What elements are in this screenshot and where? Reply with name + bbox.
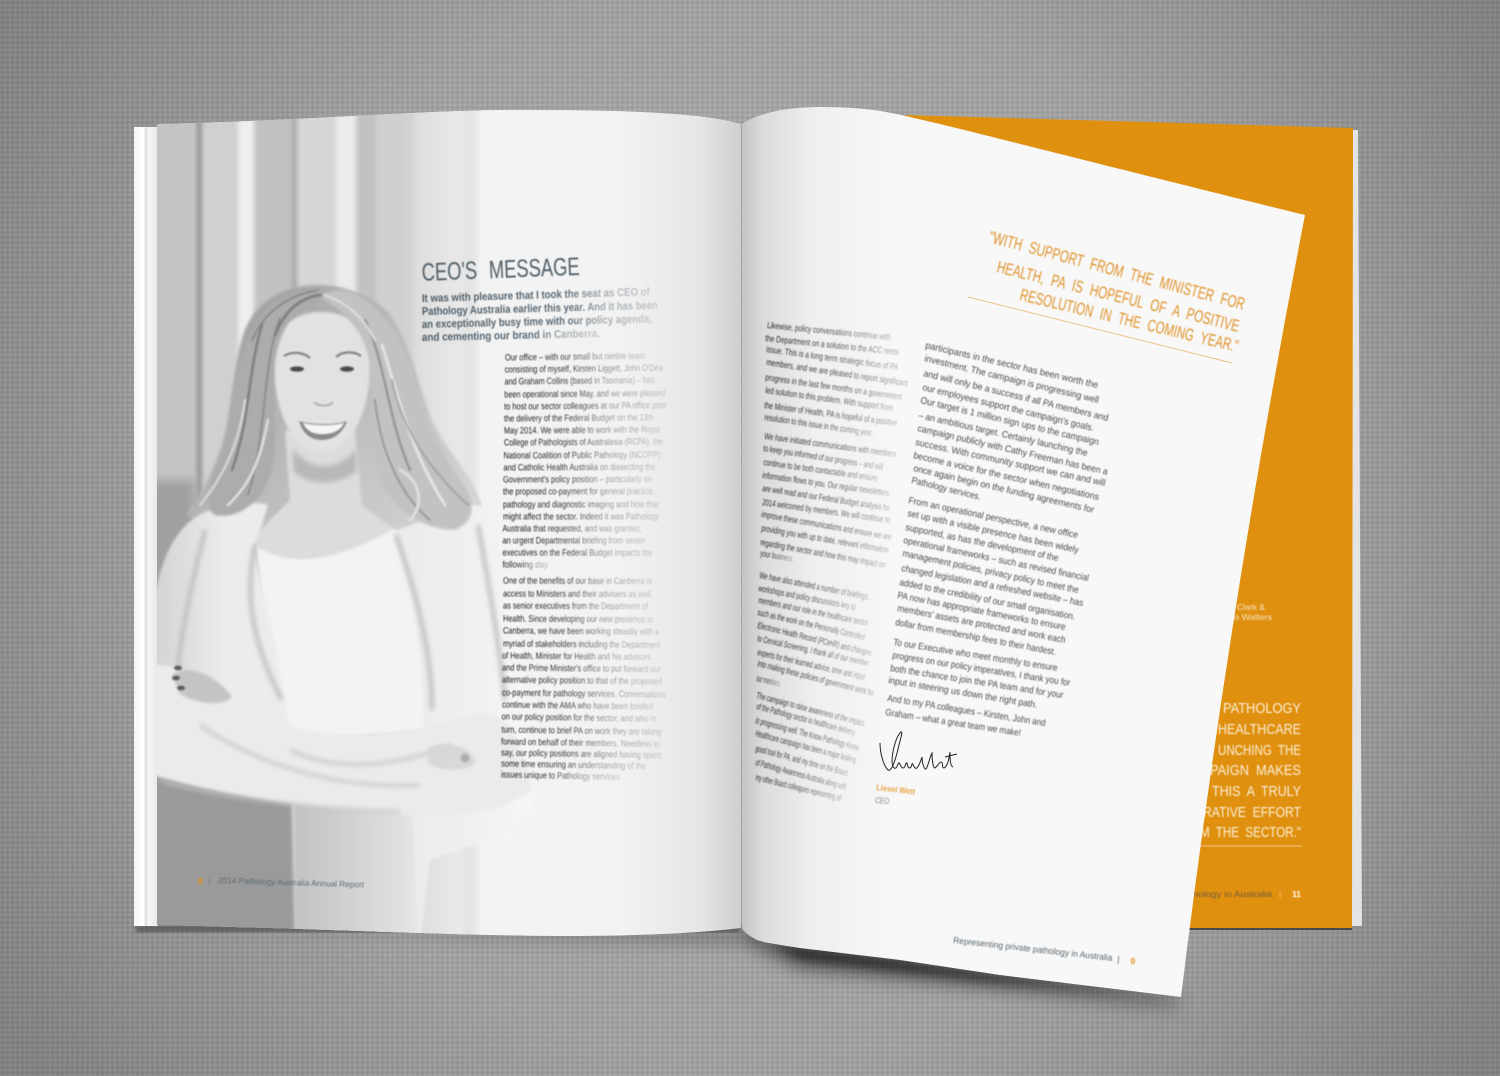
- body copy column one: [754, 320, 909, 803]
- body copy column: Health. Since developing our new presence in: [503, 614, 653, 624]
- body copy column: say, our policy positions are aligned having spent: [501, 748, 661, 760]
- body copy column two: changed legislation and a refreshed website – has: [901, 562, 1085, 608]
- orange page footer: [1190, 889, 1301, 899]
- signature: [880, 732, 957, 770]
- darker lower backdrop: [157, 476, 196, 589]
- left page footer: 8: [198, 876, 203, 886]
- right page footer: 9: [1130, 956, 1136, 967]
- body copy column two: Pathology services.: [911, 474, 982, 502]
- pull quote rule: [968, 297, 1232, 363]
- body copy column one: The campaign to raise awareness of the impact: [755, 690, 866, 728]
- neck and chest: [256, 429, 392, 560]
- arm folds: [160, 725, 450, 812]
- body copy column one: continue to be both contactable and ensure: [763, 457, 878, 483]
- body copy column one: Likewise, policy conversations continue with: [767, 320, 891, 342]
- body copy column one: progress in the last few months on a government: [765, 372, 903, 402]
- hair strands: [200, 290, 468, 520]
- intro paragraph: Pathology Australia earlier this year. And it has been: [422, 300, 658, 318]
- hair front left: [210, 323, 288, 518]
- body copy column two: progress on our policy imperatives, I thank you for: [892, 649, 1071, 688]
- signatory title: CEO: [875, 795, 890, 806]
- body copy column two: members' assets are protected and work each: [897, 602, 1067, 645]
- lower jacket left: [157, 775, 296, 929]
- body copy column one: your business.: [760, 548, 795, 564]
- magazine drop shadows: [136, 926, 1181, 1006]
- body copy column one: experts for their learned advice, time and input: [757, 647, 866, 682]
- ring: [460, 754, 470, 762]
- body copy column two: campaign publicly with Cathy Freeman has been a: [917, 422, 1110, 477]
- intro paragraph: an exceptionally busy time with our policy agenda,: [422, 313, 652, 331]
- white top: [255, 528, 425, 745]
- body copy column one: providing you with up to date, relevant information: [761, 523, 889, 555]
- name fragments: Clark &: [1237, 602, 1265, 612]
- body copy column: Our office – with our small but nimble team: [505, 351, 645, 362]
- jacket: [157, 502, 484, 933]
- backdrop fade into page: [432, 110, 500, 936]
- lower jacket right: [294, 804, 410, 932]
- title: CEO'S MESSAGE: [421, 253, 580, 287]
- name fragments: [1234, 602, 1272, 622]
- body copy column: might affect the sector. Indeed it was Pathology: [503, 511, 659, 521]
- hair back: [187, 284, 482, 522]
- orange page footer: |: [1279, 889, 1281, 899]
- body copy column two: Our target is 1 million sign ups to the campaign: [920, 394, 1100, 447]
- orange page pull quote: M THE SECTOR.": [1200, 824, 1301, 841]
- panel: left page text: [198, 253, 667, 890]
- orange page footer: 11: [1292, 889, 1301, 899]
- body copy column one: are well read and our Federal Budget analysis for: [762, 483, 891, 513]
- body copy column: alternative policy position to that of the proposed: [502, 675, 662, 686]
- body copy column one: Healthcare campaign has been a major looking: [754, 728, 858, 765]
- body copy column: May 2014. We were able to work with the Royal: [504, 424, 660, 435]
- intro paragraph: [422, 286, 658, 344]
- body copy column two: our employees support the campaign's goals.: [922, 381, 1095, 433]
- body copy column: the proposed co-payment for general practice,: [503, 486, 655, 496]
- body copy column: One of the benefits of our base in Canberra is: [503, 576, 652, 586]
- hand on sleeve: [172, 670, 232, 703]
- panel: left page with portrait: [145, 100, 750, 950]
- body copy column: continue with the AMA who have been briefed: [502, 700, 653, 711]
- body copy column one: improve these communications and ensure we are: [761, 509, 892, 542]
- body copy column: access to Ministers and their advisers as well: [503, 589, 651, 599]
- body copy column: College of Pathologists of Australasia (RCPA), the: [504, 437, 663, 447]
- body copy column one: to keep you informed of our progress – and will: [763, 443, 884, 472]
- body copy column one: my other Board colleagues representing all: [755, 772, 842, 803]
- body copy column one: members, and we are pleased to report significant: [766, 357, 909, 388]
- body copy column one: We have also attended a number of briefings,: [759, 570, 870, 602]
- left page footer: |: [208, 876, 210, 886]
- body copy column one: workshops and policy discussions key to: [757, 583, 857, 612]
- body copy column: consisting of myself, Kirsten Liggett, John O'Dea: [505, 363, 664, 374]
- orange page pull quote: PATHOLOGY: [1223, 700, 1301, 717]
- crossed arms: [152, 665, 532, 816]
- body copy column two: participants in the sector has been worth the: [925, 339, 1099, 390]
- orange page pull quote: RATIVE EFFORT: [1203, 804, 1301, 821]
- body copy column: of Health, Minister for Health and his advisors: [502, 651, 651, 662]
- body copy column two: management policies, privacy policy to meet the: [902, 547, 1080, 595]
- body copy column one: the Minister of Health, PA is hopeful of a positive: [764, 400, 898, 428]
- body copy column one: of the Pathology sector in healthcare delivery: [755, 701, 857, 737]
- body copy column two: added to the credibility of our small organisation.: [899, 576, 1076, 622]
- body copy column one: issue. This is a long term strategic focus of PA: [766, 344, 899, 372]
- intro paragraph: and cementing our brand in Canberra.: [422, 328, 600, 344]
- body copy column: the delivery of the Federal Budget on the 13th: [504, 412, 654, 423]
- pull quote: [987, 228, 1247, 356]
- body copy column one: such as the work on the Personally Controlled: [757, 607, 866, 642]
- orange page footer: thology in Australia: [1190, 889, 1272, 899]
- body copy column one: regarding the sector and how this may impact on: [760, 537, 886, 570]
- signatory name: Liesel Wett: [876, 782, 916, 797]
- body copy column: as senior executives from the Department of: [503, 601, 648, 611]
- body copy column: following day.: [502, 560, 550, 570]
- body copy column: Australia that requested, and was granted,: [502, 524, 642, 534]
- body copy column two: set up with a visible presence has been widely: [907, 507, 1080, 555]
- body copy column one: our members.: [756, 673, 782, 689]
- body copy column two: investment. The campaign is progressing well: [924, 352, 1100, 405]
- panel: orange back page 11: [905, 115, 1362, 930]
- pull quote: "WITH SUPPORT FROM THE MINISTER FOR: [987, 228, 1247, 314]
- body copy column: forward on behalf of their members. Needless to: [501, 737, 660, 749]
- body copy column two: success. With community support we can and will: [915, 436, 1107, 488]
- body copy column two: dollar from membership fees to their hardest.: [895, 616, 1057, 657]
- body copy column: on our policy position for the sector, and who in: [501, 712, 657, 724]
- body copy column one: members and our role in the healthcare sector: [758, 595, 869, 628]
- orange page pull quote: UNCHING THE: [1218, 742, 1301, 759]
- body copy column two: [885, 339, 1110, 738]
- jacket lapel shadows: [178, 525, 505, 710]
- nose: [314, 402, 333, 406]
- body copy column one: resolution to this issue in the coming year.: [764, 412, 874, 438]
- body copy column: been operational since May, and we were pleased: [504, 388, 665, 399]
- panel: right page 9: [742, 107, 1305, 997]
- page edge stack: left: [134, 127, 158, 926]
- orange page pull quote: HEALTHCARE: [1218, 721, 1301, 738]
- curtain backdrop: [150, 100, 480, 950]
- body copy column two: once again begin on the funding agreements for: [913, 462, 1095, 515]
- body copy column one: 2014 welcomed by members. We will continue to: [762, 497, 891, 525]
- body copy column: Government's policy position – particularly on: [503, 474, 652, 484]
- body copy column: some time ensuring an understanding of the: [501, 759, 646, 771]
- body copy column one: of Pathology Awareness Australia along with: [754, 757, 848, 792]
- right page footer: |: [1117, 954, 1120, 964]
- body copy column two: Graham – what a great team we make!: [885, 706, 1022, 738]
- right page footer: Representing private pathology in Australia: [953, 935, 1113, 963]
- body copy column one: led solution to this problem. With support from: [765, 385, 894, 413]
- body copy column: [501, 351, 667, 782]
- body copy column two: supported, as has the development of the: [905, 521, 1060, 563]
- page edge stack: [1350, 130, 1362, 926]
- body copy column two: operational frameworks – such as revised financial: [903, 534, 1090, 583]
- body copy column one: to Cervical Screening. I thank all of our member: [757, 633, 870, 668]
- fingernails: [172, 666, 185, 690]
- body copy column two: To our Executive who meet monthly to ensure: [893, 636, 1058, 673]
- body copy column two: And to my PA colleagues – Kirsten, John and: [887, 692, 1046, 728]
- pull quote: HEALTH, PA IS HOPEFUL OF A POSITIVE: [995, 257, 1241, 336]
- body copy column: an urgent Departmental briefing from senior: [502, 536, 646, 546]
- body copy column: pathology and diagnostic imaging and how that: [503, 499, 659, 509]
- body copy column: co-payment for pathology services. Conversations: [502, 688, 666, 700]
- body copy column two: become a voice for the sector when negotiations: [913, 449, 1101, 502]
- page base: [150, 100, 750, 950]
- body copy column one: the Department on a solution to the ACC rents: [765, 333, 899, 357]
- body copy column one: is progressing well. The Know Pathology Know: [754, 715, 861, 753]
- orange page pull quote: THIS A TRULY: [1212, 783, 1301, 800]
- pull quote: RESOLUTION IN THE COMING YEAR.": [1018, 285, 1240, 356]
- body copy column: and Catholic Health Australia on dissecting the: [503, 462, 656, 472]
- body copy column two: – an ambitious target. Certainly launching the: [918, 409, 1089, 458]
- body copy column: executives on the Federal Budget impacts the: [502, 548, 653, 558]
- body copy column two: and will only be a success if all PA members and: [923, 367, 1110, 423]
- body copy column: National Coalition of Public Pathology (NCOPP): [503, 450, 661, 460]
- body copy column: Canberra, we have been working steadily with a: [503, 626, 660, 637]
- smile: [299, 421, 347, 440]
- name fragments: o Walters: [1234, 612, 1272, 622]
- intro paragraph: It was with pleasure that I took the seat as CEO of: [422, 286, 650, 305]
- body copy column: and the Prime Minister's office to put forward our: [502, 663, 661, 674]
- hair front right: [322, 290, 472, 530]
- body copy column: to host our sector colleagues at our PA office post: [504, 400, 667, 411]
- body copy column: turn, continue to brief PA on work they are taking: [501, 725, 662, 737]
- eyes and brows: [284, 352, 361, 372]
- body copy column one: We have initiated communications with members: [764, 431, 897, 459]
- body copy column: myriad of stakeholders including the Department: [503, 639, 660, 650]
- body copy column: issues unique to Pathology services.: [501, 770, 622, 782]
- portrait of the CEO: [157, 284, 509, 933]
- body copy column two: PA now has appropriate frameworks to ensure: [897, 589, 1067, 632]
- orange page pull quote: PAIGN MAKES: [1210, 762, 1301, 779]
- face: [274, 310, 370, 432]
- body copy column one: information flows to you. Our regular newsletters: [762, 470, 890, 498]
- body copy column two: input in steering us down the right path.: [888, 674, 1038, 710]
- neck shadow: [292, 448, 356, 482]
- body copy column: and Graham Collins (based in Tasmania) – has: [505, 375, 655, 386]
- orange page pull quote: [1190, 700, 1302, 846]
- hand with ring: [428, 744, 476, 770]
- body copy column one: Electronic Health Record (PCeHR) and changes: [757, 620, 873, 658]
- page sheet: [742, 107, 1305, 997]
- body copy column one: good tool for PA, and my time on the Board: [754, 743, 849, 778]
- body copy column one: into making these policies of government work for: [756, 658, 875, 698]
- body copy column two: From an operational perspective, a new office: [908, 494, 1079, 540]
- left page footer: 2014 Pathology Australia Annual Report: [218, 875, 365, 890]
- body copy column two: both the chance to join the PA team and for your: [890, 662, 1064, 700]
